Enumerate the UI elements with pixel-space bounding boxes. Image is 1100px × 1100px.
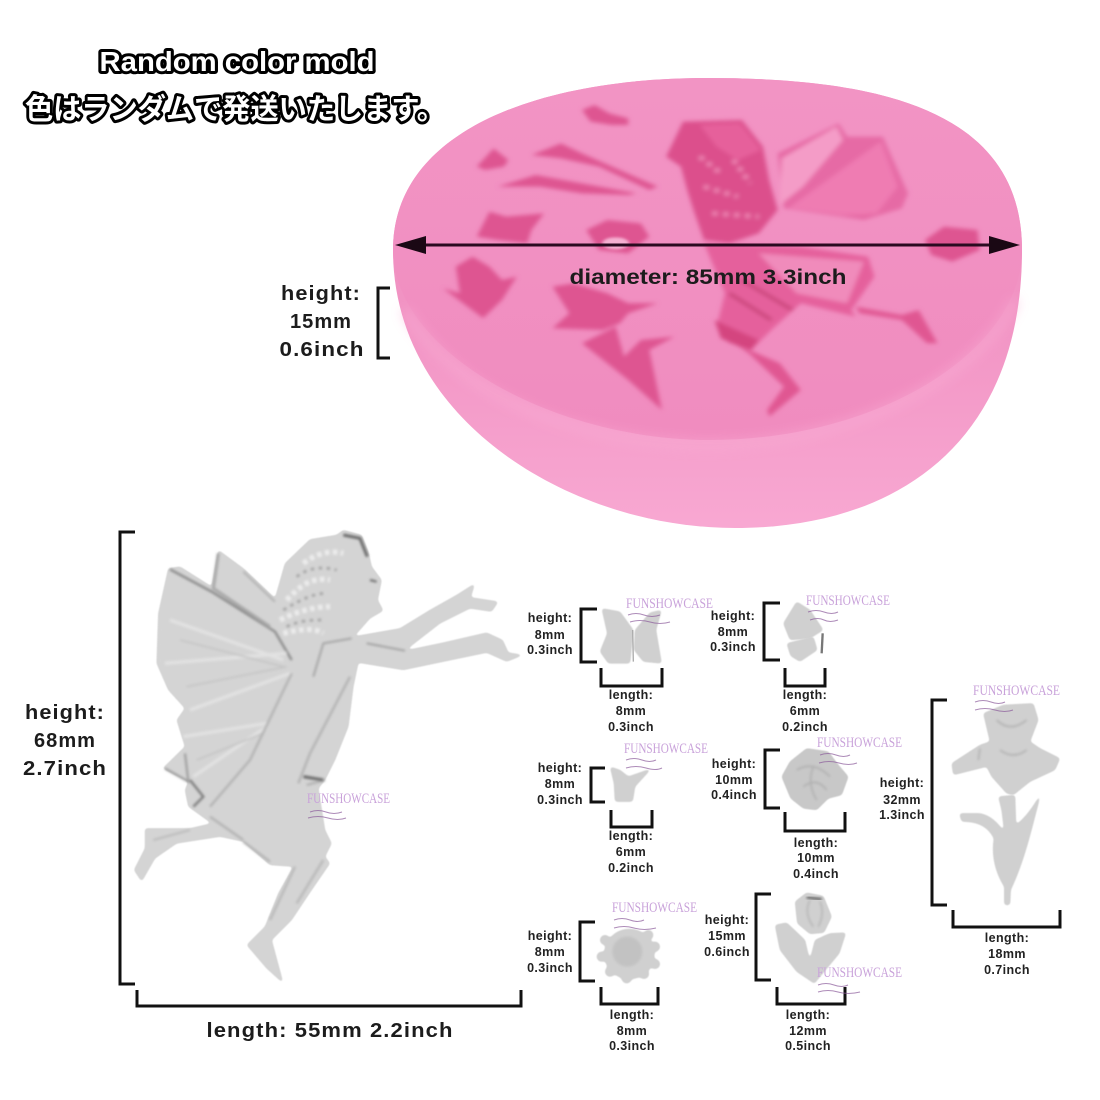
sun flower: [597, 929, 660, 983]
cavities on top face: [443, 105, 980, 417]
labels: butterfly 2: 0.2inch: [782, 720, 828, 734]
labels: tulip: height:: [705, 913, 749, 927]
fairy figure: [134, 530, 523, 983]
labels: sun flower: 8mm: [617, 1024, 647, 1038]
labels: butterfly 1: [527, 611, 654, 734]
pink silicone mold: [393, 78, 1022, 528]
fairy length bracket: [137, 990, 521, 1006]
labels: iris: height:: [880, 776, 924, 790]
watermarks on small parts: FUNSHOWCASE: [624, 741, 708, 757]
fairy wing highlights and folds: [153, 535, 405, 920]
labels: tulip: [704, 913, 831, 1053]
mold height label: [280, 283, 390, 361]
labels: butterfly 3: 6mm: [616, 845, 646, 859]
labels: butterfly 3: 8mm: [545, 777, 575, 791]
fairy length label: length: 55mm 2.2inch: [206, 1020, 454, 1042]
labels: peony flower: 10mm: [797, 851, 835, 865]
labels: butterfly 2: 0.3inch: [710, 640, 756, 654]
mold height label: 15mm: [290, 311, 352, 333]
labels: sun flower: 8mm: [535, 945, 565, 959]
labels: butterfly 1: 0.3inch: [608, 720, 654, 734]
labels: peony flower: length:: [794, 836, 838, 850]
labels: butterfly 1: height:: [528, 611, 572, 625]
labels: iris: [879, 776, 1030, 977]
butterfly 3: [610, 767, 652, 802]
fairy watermark: FUNSHOWCASE: [307, 791, 390, 807]
fairy head and hair cavity: [666, 120, 778, 243]
watermarks on small parts: FUNSHOWCASE: [973, 683, 1060, 699]
labels: sun flower: height:: [528, 929, 572, 943]
labels: butterfly 1: 8mm: [535, 628, 565, 642]
fairy height bracket: [120, 532, 135, 984]
labels: butterfly 1: 8mm: [616, 704, 646, 718]
labels: butterfly 1: length:: [609, 688, 653, 702]
labels: iris: 0.7inch: [984, 963, 1030, 977]
fairy height label: height:: [25, 702, 105, 724]
labels: butterfly 2: height:: [711, 609, 755, 623]
small parts: row 1 and 2: [600, 602, 848, 810]
labels: peony flower: 0.4inch: [711, 788, 757, 802]
fairy legs cavity: [742, 307, 938, 417]
labels: butterfly 1: 0.3inch: [527, 643, 573, 657]
tulip: [775, 893, 846, 984]
watermarks on small parts: FUNSHOWCASE: [612, 900, 697, 916]
labels: sun flower: length:: [610, 1008, 654, 1022]
labels: peony flower: [711, 757, 839, 881]
butterfly 2: [783, 602, 823, 662]
labels: iris: 32mm: [883, 793, 921, 807]
mold top face: [393, 78, 1022, 440]
labels: sun flower: [527, 929, 655, 1053]
fairy wings cavity: [778, 123, 908, 220]
diameter label: diameter: 85mm 3.3inch: [570, 266, 846, 289]
labels: sun flower: 0.3inch: [609, 1039, 655, 1053]
labels: butterfly 3: height:: [538, 761, 582, 775]
labels: butterfly 2: 6mm: [790, 704, 820, 718]
iris flower: [952, 703, 1060, 905]
watermarks on small parts: FUNSHOWCASE: [626, 596, 713, 612]
heading: random color mold: 色はランダムで発送いたします。: [25, 92, 445, 126]
small flower and butterfly cavities: [443, 105, 980, 410]
watermarks on small parts: FUNSHOWCASE: [817, 735, 902, 751]
labels: iris: length:: [985, 931, 1029, 945]
labels: peony flower: 10mm: [715, 773, 753, 787]
watermarks on small parts: [612, 593, 1060, 994]
labels: tulip: 12mm: [789, 1024, 827, 1038]
mold side wall: [393, 78, 1022, 528]
labels: tulip: 15mm: [708, 929, 746, 943]
heading: random color mold: [25, 46, 445, 126]
labels: butterfly 3: [537, 761, 654, 875]
fairy dress cavity: [704, 243, 874, 352]
labels: sun flower: 0.3inch: [527, 961, 573, 975]
butterfly 1: [600, 608, 662, 663]
labels: tulip: 0.6inch: [704, 945, 750, 959]
fairy height label: 2.7inch: [23, 758, 107, 780]
labels: peony flower: 0.4inch: [793, 867, 839, 881]
bracket set for small parts: [580, 603, 1060, 1004]
labels: butterfly 3: length:: [609, 829, 653, 843]
labels: butterfly 2: length:: [783, 688, 827, 702]
fairy watermark: [307, 791, 390, 820]
labels: tulip: 0.5inch: [785, 1039, 831, 1053]
labels: peony flower: height:: [712, 757, 756, 771]
heading: random color mold: Random color mold: [100, 46, 374, 77]
labels: tulip: length:: [786, 1008, 830, 1022]
small parts: row 3: [597, 893, 846, 984]
fairy height label: [23, 702, 107, 780]
labels: butterfly 3: 0.2inch: [608, 861, 654, 875]
labels: butterfly 2: [710, 609, 828, 734]
peony flower: [782, 748, 848, 810]
labels: butterfly 2: 8mm: [718, 625, 748, 639]
labels: iris: 18mm: [988, 947, 1026, 961]
watermarks on small parts: FUNSHOWCASE: [817, 965, 902, 981]
fairy height label: 68mm: [34, 730, 96, 752]
watermarks on small parts: FUNSHOWCASE: [806, 593, 890, 609]
labels: iris: 1.3inch: [879, 808, 925, 822]
labels: butterfly 3: 0.3inch: [537, 793, 583, 807]
diameter arrow: [395, 236, 1020, 254]
mold height label: 0.6inch: [280, 339, 364, 361]
mold height label: height:: [281, 283, 361, 305]
